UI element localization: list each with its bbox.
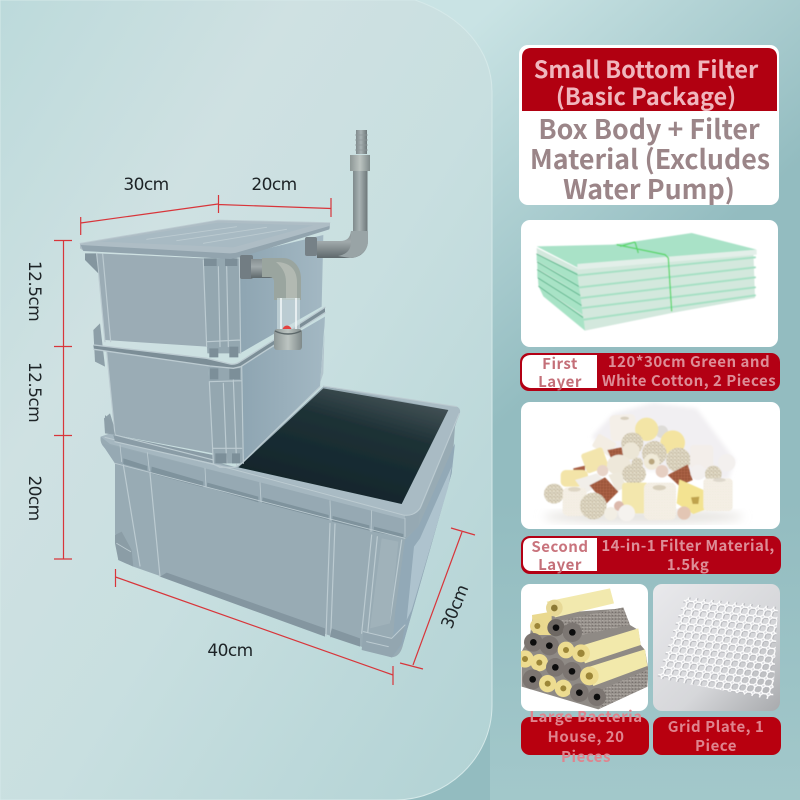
dimension: height axis [24,240,72,559]
heading: Small Bottom Filter [534,51,759,85]
top crate [240,235,323,353]
outlet pipe with barb [305,130,370,258]
cotton stack [537,233,757,331]
label: grid plate: Piece [695,735,737,756]
dimension: 30cm side: 30cm [438,582,473,632]
dimension: 40cm front [116,569,393,685]
label: large bacteria house: Large Bacteria [529,706,643,727]
dimension: 30cm top [81,175,218,235]
label: grid plate [653,716,781,756]
product illustration: stacked filter boxes [80,130,460,657]
photo: large bacteria house [516,584,648,711]
media pile [543,403,743,523]
photo: green and white cotton [521,220,778,347]
heading [534,51,759,112]
label bar: second layer [521,535,781,575]
label bar: first layer: First [542,353,578,374]
subheading: Material (Excludes [530,138,770,177]
subheading: Box Body + Filter [538,108,760,147]
dimension: 20cm top: 20cm [251,175,297,195]
layer description: 14-in-1 Filter Material, [601,535,775,556]
label bar: first layer: Layer [538,371,582,392]
middle crate [242,317,325,463]
plastic grid [657,597,778,700]
dimension: height axis: 12.5cm [24,362,44,422]
photo: 14-in-1 filter material [521,402,780,529]
layer description: 120*30cm Green and [608,351,770,372]
dimension: 20cm top [218,175,331,217]
label bar: first layer [520,351,780,392]
photo: grid plate [653,584,780,711]
bottom crate [101,386,460,657]
title ribbon [522,48,777,111]
title card [519,45,779,207]
label: large bacteria house: Pieces [561,746,611,767]
dimension: 30cm side [400,528,475,669]
left product panel [0,0,492,800]
dimension: 40cm front: 40cm [207,641,253,661]
label bar: first layer: White Cotton, 2 Pieces [602,370,776,391]
dimension: height axis: 20cm [24,475,44,521]
layer tag [522,355,597,388]
crate rim [93,307,325,368]
dimension: height axis: 12.5cm [24,261,44,321]
subheading: Water Pump) [563,168,735,207]
sight tube with elbow [240,255,302,350]
dimension: 30cm top: 30cm [123,175,169,195]
label: large bacteria house: House, 20 [548,726,624,747]
label bar: second layer: Layer [538,554,582,575]
label: grid plate: Grid Plate, 1 [668,716,764,737]
layer tag [523,538,597,571]
label: large bacteria house [521,706,649,767]
middle and top crates [80,220,330,467]
heading: (Basic Package) [556,78,736,112]
label bar: second layer: Second [531,536,589,557]
subheading [530,108,770,207]
lid [80,220,330,259]
label bar: second layer: 1.5kg [667,554,709,575]
bacteria house tubes [516,588,648,709]
